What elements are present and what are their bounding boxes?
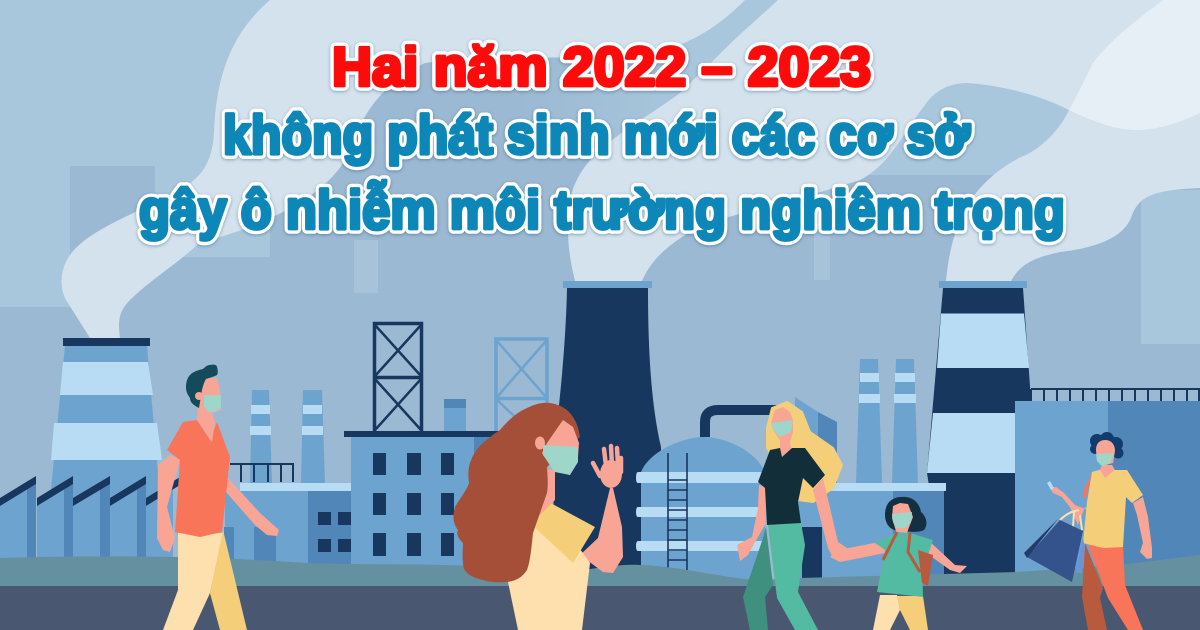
person: man in orange shirt [157, 365, 279, 630]
title: three lines [139, 36, 1065, 240]
pipe [705, 410, 780, 437]
light blue truss [495, 339, 548, 431]
title line 1: Hai năm 2022 – 2023 [332, 36, 871, 98]
low building left [224, 483, 362, 567]
rear building behind family [795, 397, 944, 578]
dark truss [374, 324, 422, 431]
rear small chimneys left [250, 390, 325, 483]
small stack on building [444, 399, 466, 431]
ground and road [0, 555, 1200, 630]
right railing [1031, 389, 1200, 401]
title line 3: gây ô nhiễm môi trường nghiêm trọng [139, 178, 1065, 240]
person: woman with long red hair [453, 403, 623, 630]
left cooling tower [48, 338, 162, 520]
sawtooth sheds [0, 476, 180, 560]
title line 2: không phát sinh mới các cơ sở [223, 104, 971, 166]
title line 1: Hai năm 2022 – 2023 [332, 36, 871, 98]
rear small chimneys right [856, 359, 918, 483]
dark cooling tower [552, 279, 662, 570]
railing left [230, 464, 293, 482]
storage tank [636, 437, 765, 580]
person: blonde woman [737, 402, 850, 630]
person: child with backpack [830, 497, 967, 630]
title line 2: không phát sinh mới các cơ sở [223, 104, 971, 166]
person: man with shopping bags [1024, 432, 1152, 630]
right large building [1015, 401, 1200, 581]
right striped tower [830, 279, 1031, 575]
title line 3: gây ô nhiễm môi trường nghiêm trọng [139, 178, 1065, 240]
central building [344, 431, 504, 567]
smoke plumes [62, 0, 1200, 338]
